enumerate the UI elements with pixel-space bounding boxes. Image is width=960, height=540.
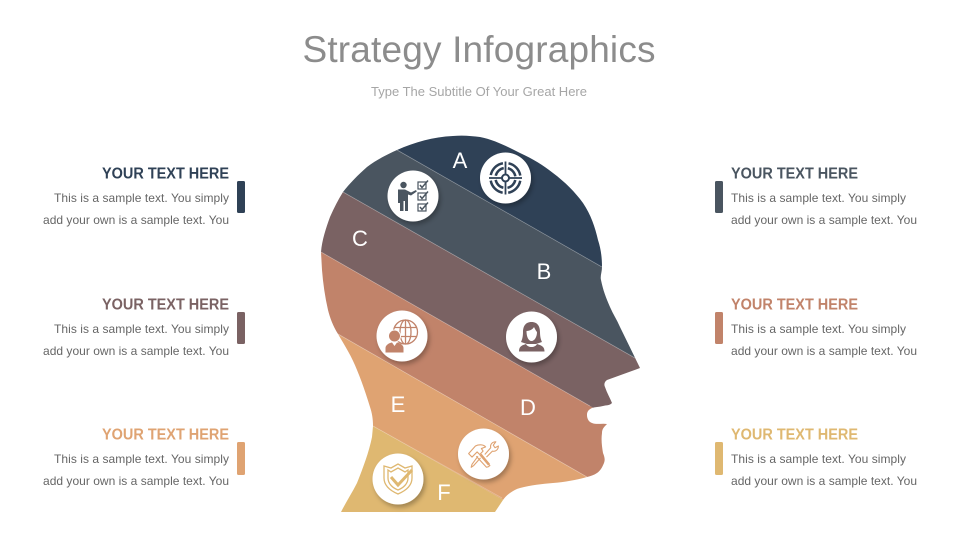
panel: left top [43,166,245,227]
heading: YOUR TEXT HERE [102,166,229,182]
body text: This is a sample text. You simply [54,452,229,466]
accent bar [715,181,723,213]
accent bar [237,442,245,475]
body text [731,452,917,488]
body text: add your own is a sample text. You [43,474,229,488]
body text: This is a sample text. You simply [54,191,229,205]
icon: shield with check [372,454,424,504]
title: Strategy Infographics [302,29,656,70]
panel: left middle [43,296,245,358]
body text: This is a sample text. You simply [731,191,906,205]
body text [43,322,229,358]
heading: YOUR TEXT HERE [102,426,229,444]
panel: right bottom [715,426,917,488]
body text [731,322,917,358]
body text [43,191,229,227]
icon: woman [506,312,557,362]
body text: add your own is a sample text. You [43,344,229,358]
letter F: F [437,480,451,505]
body text: This is a sample text. You simply [731,322,906,336]
band B [343,150,636,358]
body text: add your own is a sample text. You [731,344,917,358]
band E [338,334,587,500]
body text: This is a sample text. You simply [731,452,906,466]
head silhouette with six bands [321,136,640,512]
icon: presenter with checklist [388,170,438,222]
panel: left bottom [43,426,245,488]
band C [321,192,640,408]
panel: right top [715,166,917,227]
subtitle: Type The Subtitle Of Your Great Here [371,84,587,99]
icon: globe with person [376,310,428,362]
body text: add your own is a sample text. You [731,213,917,227]
icon: hammer and wrench [458,428,509,480]
body text [731,191,917,227]
letter C: C [352,226,368,251]
letter B: B [537,259,551,284]
icon: target [480,152,531,204]
accent bar [237,312,245,344]
heading: YOUR TEXT HERE [731,166,858,182]
heading: YOUR TEXT HERE [731,426,858,444]
letter E: E [391,392,405,417]
body text: This is a sample text. You simply [54,322,229,336]
letter A: A [453,148,468,173]
band A [397,136,602,267]
letter D: D [520,395,536,420]
body text: add your own is a sample text. You [731,474,917,488]
accent bar [715,312,723,344]
accent bar [715,442,723,475]
band F [341,426,504,512]
body text [43,452,229,488]
heading: YOUR TEXT HERE [102,296,229,314]
panel: right middle [715,296,917,358]
band D [321,252,607,477]
accent bar [237,181,245,213]
body text: add your own is a sample text. You [43,213,229,227]
heading: YOUR TEXT HERE [731,296,858,314]
